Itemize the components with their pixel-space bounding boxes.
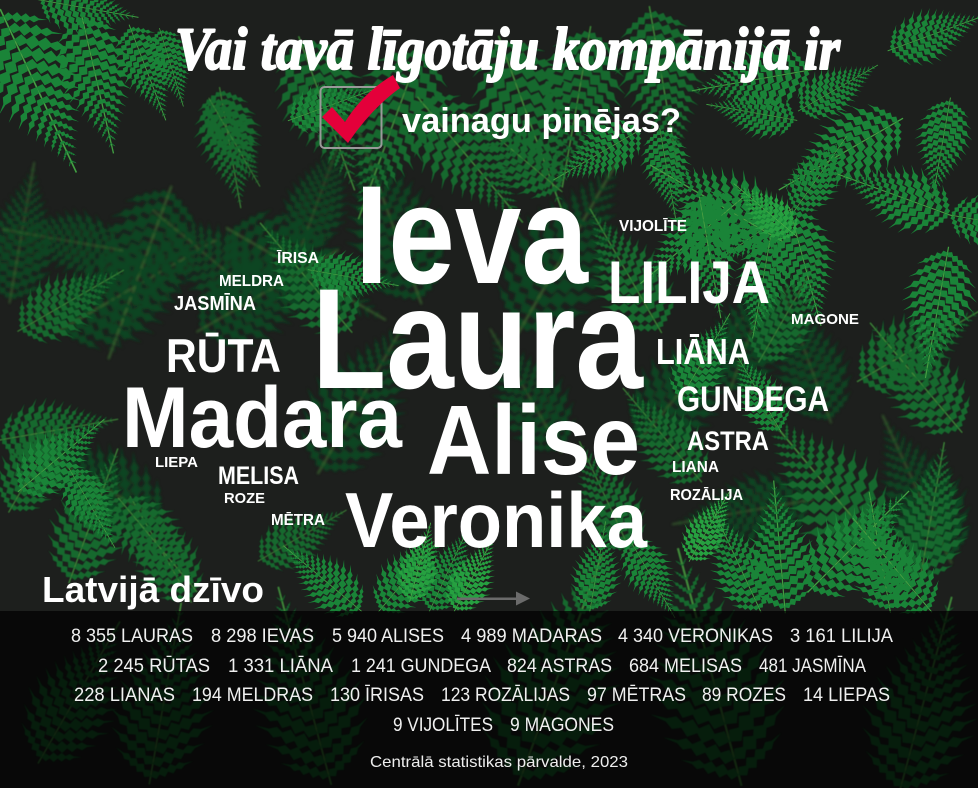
word cloud of names: Alise [427, 385, 640, 495]
word cloud of names: LIĀNA [656, 331, 750, 372]
title: Vai tavā līgotāju kompānijā ir [175, 16, 841, 82]
word cloud of names: MELDRA [219, 273, 284, 290]
word cloud of names: RŪTA [166, 329, 281, 382]
statistics list: 97 MĒTRAS [587, 685, 686, 706]
source note: Centrālā statistikas pārvalde, 2023 [370, 754, 628, 771]
statistics list: 1 331 LIĀNA [228, 656, 333, 677]
statistics list: 130 ĪRISAS [330, 685, 424, 706]
statistics list: 8 355 LAURAS [71, 626, 193, 647]
statistics list: 824 ASTRAS [507, 656, 612, 677]
word cloud of names: ĪRISA [276, 248, 319, 267]
statistics list: 9 MAGONES [510, 715, 614, 736]
word cloud of names: GUNDEGA [677, 380, 829, 419]
word cloud of names [122, 156, 859, 564]
word cloud of names: LIEPA [155, 454, 198, 471]
word cloud of names: LILIJA [608, 249, 770, 316]
statistics list: 5 940 ALISES [332, 626, 444, 647]
statistics list: 8 298 IEVAS [211, 626, 314, 647]
word cloud of names: ASTRA [687, 426, 769, 456]
statistics list: 9 VIJOLĪTES [393, 715, 493, 736]
statistics list: 4 340 VERONIKAS [618, 626, 773, 647]
statistics list: 194 MELDRAS [192, 685, 313, 706]
statistics list: 481 JASMĪNA [759, 656, 866, 677]
word cloud of names: MELISA [218, 462, 299, 490]
statistics list: 4 989 MADARAS [461, 626, 602, 647]
statistics list: 14 LIEPAS [803, 685, 890, 706]
statistics list: 3 161 LILIJA [790, 626, 893, 647]
word cloud of names: Ieva [355, 156, 589, 313]
bottom dark band [0, 611, 978, 788]
word cloud of names: LIANA [672, 459, 719, 476]
word cloud of names: MAGONE [791, 311, 859, 328]
statistics list [71, 626, 893, 736]
statistics list: 228 LIANAS [74, 685, 175, 706]
word cloud of names: VIJOLĪTE [619, 216, 687, 235]
word cloud of names: Veronika [345, 476, 648, 564]
word cloud of names: MĒTRA [271, 510, 325, 529]
icon: checkbox with red check mark [320, 75, 400, 148]
arrow [457, 592, 530, 606]
word cloud of names: ROZĀLIJA [670, 485, 743, 504]
statistics list: 684 MELISAS [629, 656, 742, 677]
statistics list: 123 ROZĀLIJAS [441, 685, 570, 706]
word cloud of names: ROZE [224, 490, 265, 507]
word cloud of names: Madara [122, 370, 403, 466]
word cloud of names: JASMĪNA [174, 293, 256, 315]
subtitle: vainagu pinējas? [402, 102, 681, 140]
statistics list: 2 245 RŪTAS [98, 656, 210, 677]
statistics list: 1 241 GUNDEGA [351, 656, 491, 677]
statistics list: 89 ROZES [702, 685, 786, 706]
word cloud of names: Laura [312, 260, 644, 419]
heading: Latvijā dzīvo: Latvijā dzīvo [42, 569, 264, 610]
